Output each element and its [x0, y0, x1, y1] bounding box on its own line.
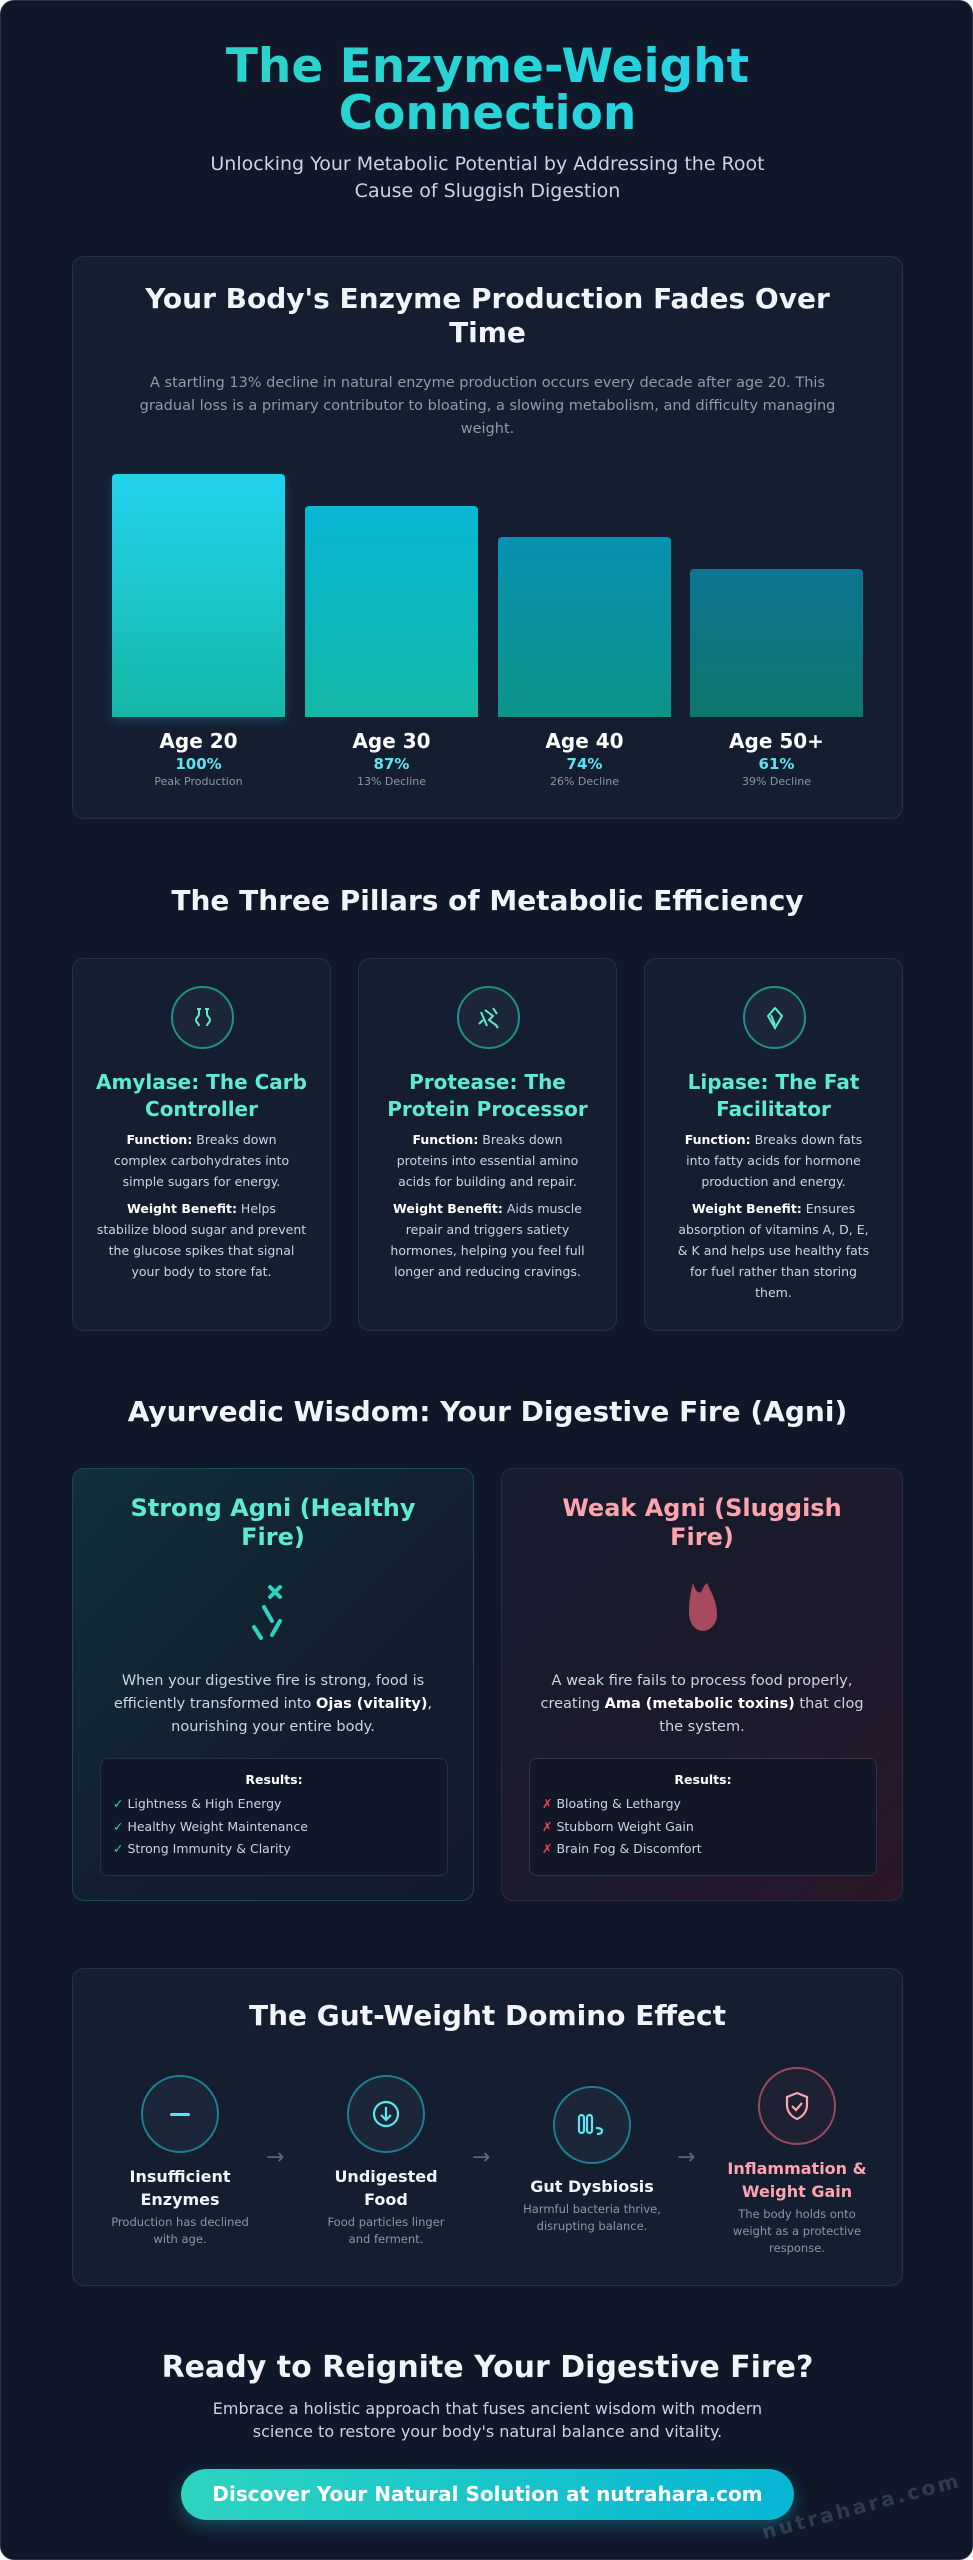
subtitle: Unlocking Your Metabolic Potential by Addressing the Root Cause of Sluggish Digestion	[210, 153, 765, 202]
bar chart	[108, 474, 863, 724]
step 1: Production has declined with age.	[111, 2215, 249, 2246]
heading: agni: Ayurvedic Wisdom: Your Digestive Fire (Agni)	[128, 1395, 847, 1428]
watermark: nutrahara.com	[759, 2468, 964, 2544]
step 2: Food particles linger and ferment.	[327, 2215, 445, 2246]
title: Lipase: The Fat Facilitator	[688, 1070, 859, 1121]
title: The Enzyme-Weight	[226, 39, 749, 94]
card: protease	[358, 958, 617, 1331]
heading: call to action: Ready to Reignite Your Digestive Fire?	[162, 2350, 813, 2385]
results box: Results:	[245, 1772, 303, 1787]
results box	[100, 1758, 448, 1876]
bar labels: 100%	[175, 755, 222, 773]
step 2: Undigested Food	[334, 2167, 438, 2209]
step 4	[727, 2067, 867, 2255]
panel: domino effect	[72, 1968, 903, 2286]
icon: lipase	[743, 986, 806, 1049]
card: amylase	[72, 958, 331, 1331]
body text	[678, 1132, 869, 1300]
results box: ✓ Lightness & High Energy	[113, 1796, 281, 1811]
results box	[529, 1758, 877, 1876]
bar labels: 61%	[759, 755, 794, 773]
step 3: Gut Dysbiosis	[530, 2177, 654, 2196]
body text: complex carbohydrates into simple sugars for energy.	[114, 1153, 289, 1189]
step 3: Harmful bacteria thrive, disrupting balance.	[523, 2202, 661, 2233]
button: Discover Your Natural Solution at nutrahara.com	[212, 2482, 763, 2506]
arrow: →	[472, 2145, 490, 2170]
bar labels: 87%	[374, 755, 409, 773]
icon: shield	[758, 2067, 836, 2145]
description: When your digestive fire is strong, food is efficiently transformed into Ojas (vitality), nourishing your entire body.	[114, 1673, 432, 1735]
title: Connection	[339, 86, 636, 141]
panel: weak agni	[501, 1468, 903, 1901]
step 1	[111, 2075, 249, 2246]
heading: The Gut-Weight Domino Effect	[249, 1999, 726, 2032]
results box: ✓ Healthy Weight Maintenance	[113, 1818, 308, 1834]
title: Amylase: The Carb Controller	[96, 1070, 307, 1121]
bar labels: 13% Decline	[357, 775, 426, 788]
step 4: The body holds onto weight as a protective response.	[733, 2207, 861, 2255]
button	[181, 2469, 794, 2520]
bar labels: Age 50+	[729, 729, 824, 753]
heading: three pillars: The Three Pillars of Metabolic Efficiency	[171, 884, 804, 917]
body text	[97, 1132, 306, 1279]
bar labels: Peak Production	[154, 775, 243, 788]
bar labels	[154, 729, 824, 788]
body text: Function: Breaks down	[126, 1132, 277, 1147]
body text: Function: Breaks down proteins into essential amino acids for building and repair.	[397, 1132, 578, 1189]
panel: strong agni	[72, 1468, 474, 1901]
description: A startling 13% decline in natural enzyme production occurs every decade after age 20. This gradual loss is a primary contributor to bloating, a slowing metabolism, and difficulty managing weight.	[140, 375, 835, 437]
bar labels: Age 30	[352, 729, 431, 753]
bar labels: Age 20	[159, 729, 238, 753]
arrow: →	[266, 2145, 284, 2170]
cta text: Embrace a holistic approach that fuses ancient wisdom with modern science to restore your body's natural balance and vitality.	[213, 2399, 762, 2441]
icon: amylase	[171, 986, 234, 1049]
step 2	[327, 2075, 445, 2246]
icon: protease	[457, 986, 520, 1049]
step 1: Insufficient Enzymes	[130, 2167, 230, 2209]
card: lipase	[644, 958, 903, 1331]
body text: Function: Breaks down fats into fatty acids for hormone production and energy.	[685, 1132, 862, 1189]
step 4: Inflammation & Weight Gain	[727, 2159, 867, 2201]
title: Strong Agni (Healthy Fire)	[130, 1494, 416, 1551]
icon: download	[347, 2075, 425, 2153]
title	[226, 39, 749, 141]
body text: Weight Benefit: Helps	[127, 1201, 276, 1216]
results box: ✗ Bloating & Lethargy	[542, 1796, 681, 1811]
bar labels: 26% Decline	[550, 775, 619, 788]
bar labels: Age 40	[545, 729, 624, 753]
results box: ✗ Stubborn Weight Gain	[542, 1818, 694, 1834]
icon: minus	[141, 2075, 219, 2153]
body text: stabilize blood sugar and prevent the glucose spikes that signal your body to store fat.	[97, 1222, 306, 1279]
icon: weak fire	[689, 1583, 717, 1631]
step 3	[523, 2086, 661, 2233]
heading: Your Body's Enzyme Production Fades Over Time	[145, 282, 830, 349]
results box: ✗ Brain Fog & Discomfort	[542, 1841, 702, 1856]
body text: Weight Benefit: Ensures absorption of vitamins A, D, E, & K and helps use healthy fats for fuel rather than storing them.	[678, 1201, 869, 1300]
results box: Results:	[674, 1772, 732, 1787]
panel: enzyme decline	[72, 256, 903, 819]
title: Protease: The Protein Processor	[387, 1070, 588, 1121]
bar labels: 74%	[567, 755, 602, 773]
results box: ✓ Strong Immunity & Clarity	[113, 1841, 291, 1856]
body text	[390, 1132, 585, 1279]
title: Weak Agni (Sluggish Fire)	[562, 1494, 842, 1551]
arrow: →	[677, 2145, 695, 2170]
description: A weak fire fails to process food properly, creating Ama (metabolic toxins) that clog the system.	[540, 1673, 864, 1735]
icon: bacteria	[553, 2086, 631, 2164]
icon: healthy fire	[252, 1584, 282, 1640]
bar labels: 39% Decline	[742, 775, 811, 788]
body text: Weight Benefit: Aids muscle repair and triggers satiety hormones, helping you feel full longer and reducing cravings.	[390, 1201, 585, 1279]
